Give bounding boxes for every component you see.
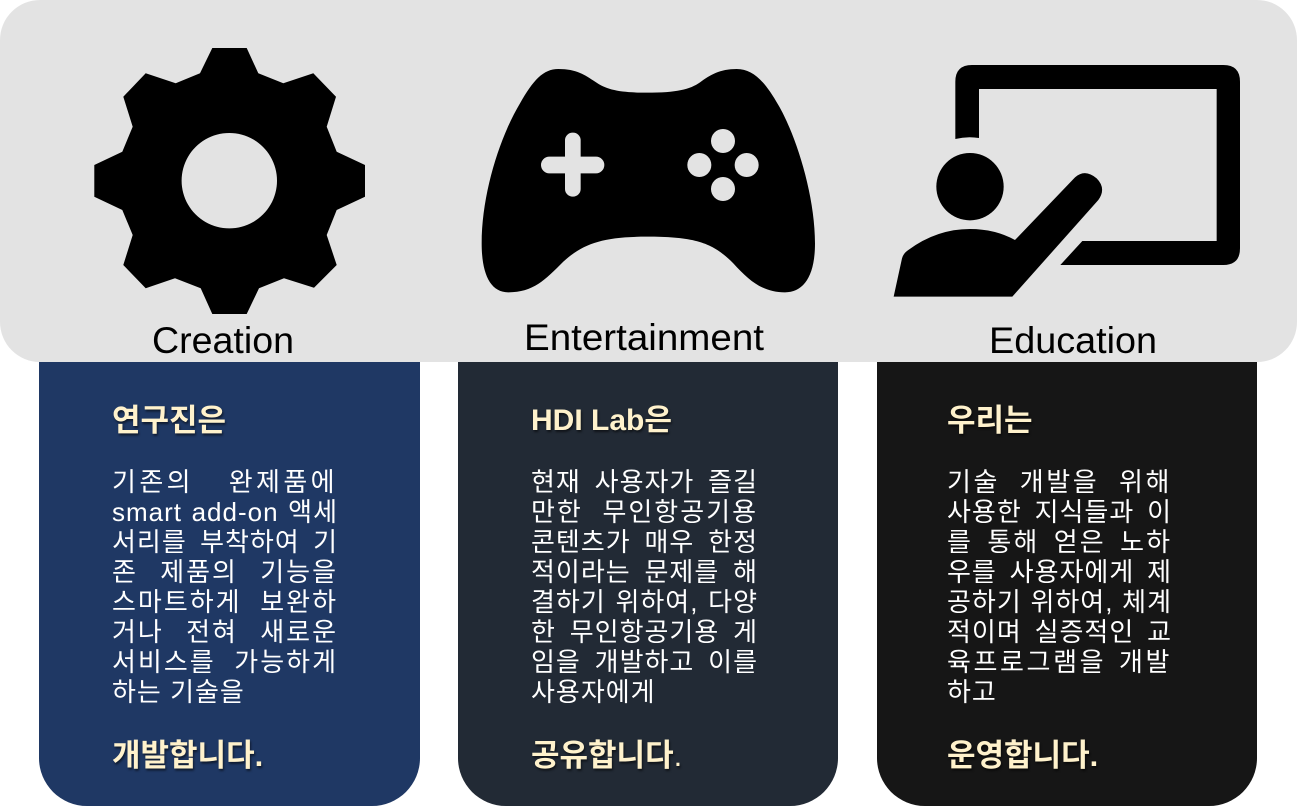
- panel: grey icon band: [0, 0, 1297, 362]
- text: creation description: 스마트하게 보완하: [112, 587, 338, 617]
- text: entertainment description: 적이라는 문제를 해: [531, 557, 758, 587]
- text: education description: 사용한 지식들과 이: [947, 497, 1172, 527]
- text: education intro: 우리는: [947, 403, 1033, 438]
- text: creation description: 서비스를 가능하게: [112, 647, 338, 677]
- text: education description: 하고: [947, 677, 997, 707]
- text: education description: 를 통해 얻은 노하: [947, 527, 1172, 557]
- text: creation description: 하는 기술을: [112, 677, 245, 707]
- text: entertainment description: 한 무인항공기용 게: [531, 617, 758, 647]
- text: education description: 적이며 실증적인 교: [947, 617, 1172, 647]
- text: entertainment intro: HDI Lab은: [531, 404, 672, 437]
- text: education description: 기술 개발을 위해: [947, 467, 1172, 497]
- panel: entertainment card: [458, 340, 838, 806]
- text: entertainment description: 결하기 위하여, 다양: [531, 587, 758, 617]
- icon: game controller: [482, 69, 815, 292]
- text: entertainment description: 사용자에게: [531, 677, 656, 707]
- text: creation description: 기존의 완제품에: [112, 467, 338, 497]
- heading: Entertainment: Entertainment: [524, 317, 765, 358]
- text: education description: [947, 467, 1172, 707]
- panel: creation card: [39, 340, 420, 806]
- text: creation closing: 개발합니다.: [112, 738, 263, 773]
- heading: Creation: Creation: [152, 320, 294, 361]
- text: creation description: 존 제품의 기능을: [112, 557, 338, 587]
- text: education description: 공하기 위하여, 체계: [947, 587, 1172, 617]
- text: creation description: smart add-on 액세: [112, 497, 338, 527]
- text: creation intro: 연구진은: [112, 403, 226, 438]
- text: entertainment description: 만한 무인항공기용: [531, 497, 758, 527]
- text: entertainment description: 임을 개발하고 이를: [531, 647, 758, 677]
- text: creation description: [112, 467, 338, 707]
- icon: gear: [94, 48, 365, 314]
- text: education description: 우를 사용자에게 제: [947, 557, 1172, 587]
- icon: teacher at board: [894, 65, 1240, 297]
- text: creation description: 서리를 부착하여 기: [112, 527, 338, 557]
- text: education description: 육프로그램을 개발: [947, 647, 1172, 677]
- text: entertainment closing: 공유합니다.: [531, 738, 682, 773]
- text: entertainment description: 콘텐츠가 매우 한정: [531, 527, 758, 557]
- panel: education card: [877, 340, 1257, 806]
- text: entertainment description: [531, 467, 758, 707]
- text: education closing: 운영합니다.: [947, 738, 1098, 773]
- text: entertainment description: 현재 사용자가 즐길: [531, 467, 758, 497]
- heading: Education: Education: [989, 320, 1157, 361]
- text: creation description: 거나 전혀 새로운: [112, 617, 338, 647]
